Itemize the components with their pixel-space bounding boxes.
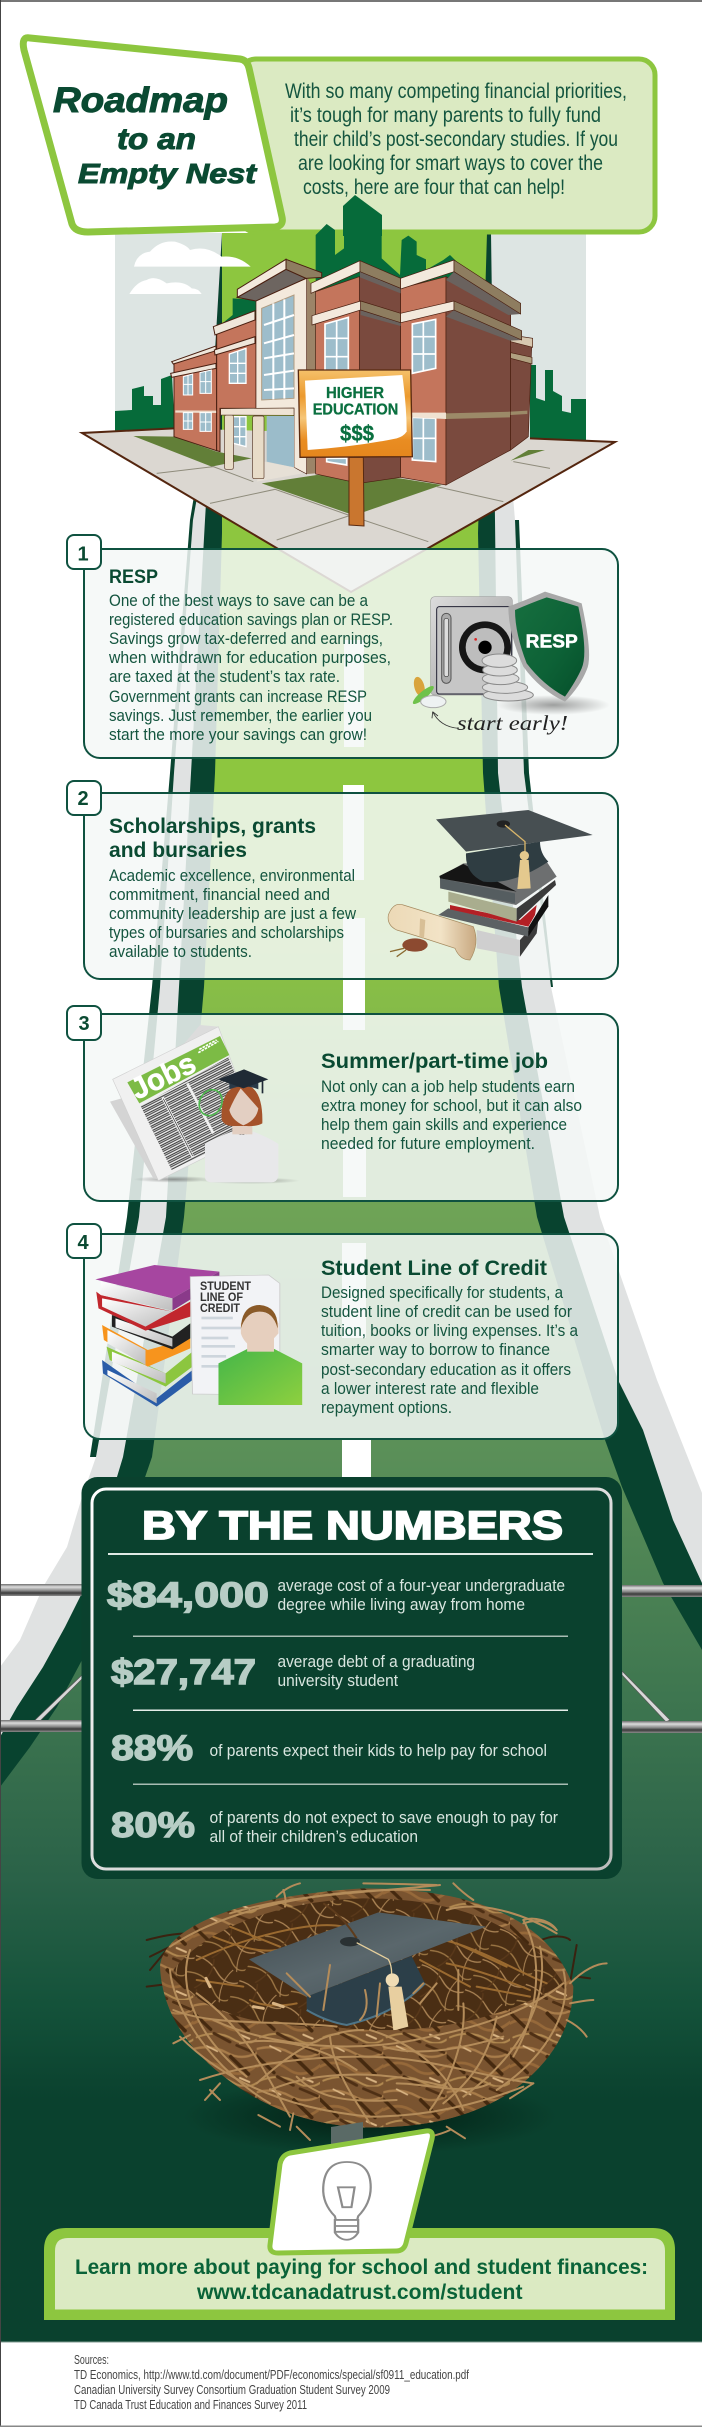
body text [321, 1078, 582, 1153]
newspaper headline: Jobs [126, 1047, 201, 1106]
stat: 88% [111, 1729, 547, 1768]
body text: are taxed at the student’s tax rate. [109, 668, 340, 686]
far left wing [171, 346, 217, 451]
body text: types of bursaries and scholarships [109, 924, 344, 942]
entrance [221, 408, 303, 482]
stat: $84,000 [107, 1576, 565, 1615]
call to action text: Learn more about paying for school and student finances: [75, 2255, 648, 2279]
nest bowl [160, 1888, 573, 2127]
interior twigs [173, 1898, 563, 2035]
body text: a lower interest rate and flexible [321, 1380, 539, 1398]
mid-left wing [213, 311, 256, 452]
guard rails [1, 1584, 702, 1733]
body text: Not only can a job help students earn [321, 1078, 575, 1096]
skyline: tower over intro panel [343, 195, 382, 236]
body text: available to students. [109, 943, 252, 961]
body text [321, 1284, 579, 1417]
call to action text [75, 2255, 648, 2304]
footer: sources: TD Economics, http://www.td.com/document/PDF/economics/special/sf0911_education.pdf [74, 2368, 469, 2382]
loose back twigs [147, 1933, 590, 1987]
illustration: school building [82, 224, 615, 592]
icon: cap, books and scroll [388, 810, 593, 960]
road: left outer edge [90, 430, 209, 1457]
light bulb [323, 2162, 371, 2240]
nest strands [170, 1883, 607, 2140]
clouds [129, 241, 251, 294]
road: right outer edge [515, 520, 553, 987]
number badge 1: 1 [77, 544, 89, 566]
sign post [349, 457, 364, 526]
main windows [325, 317, 436, 465]
body text: Academic excellence, environmental [109, 867, 355, 885]
body text: savings. Just remember, the earlier you [109, 707, 372, 725]
icon: safe, coins, shield and pacifier [411, 592, 610, 735]
footer: sources: Canadian University Survey Consortium Graduation Student Survey 2009 [74, 2383, 390, 2397]
heading: and bursaries [109, 839, 247, 862]
application title: LINE OF [200, 1290, 243, 1304]
heading: BY THE NUMBERS [142, 1504, 563, 1548]
sidewalk base [82, 428, 615, 592]
sign stem under nest [331, 2122, 363, 2150]
body text: tuition, books or living expenses. It’s a [321, 1322, 579, 1340]
body text: extra money for school, but it can also [321, 1097, 582, 1115]
trim band [412, 411, 527, 419]
heading: Summer/part-time job [321, 1050, 548, 1073]
panel: learn more [44, 2228, 675, 2320]
tower roof [237, 259, 322, 301]
sidewalk joints [157, 462, 550, 542]
application title: CREDIT [200, 1301, 241, 1315]
stat: 88%: of parents expect their kids to help pay for school [210, 1742, 547, 1760]
title text: to an [117, 123, 196, 156]
number badge 3: 3 [78, 1013, 90, 1035]
body text: needed for future employment. [321, 1135, 535, 1153]
intro text: With so many competing financial priorities, [285, 80, 627, 103]
panel: step 3 summer job [67, 1006, 618, 1201]
body text: repayment options. [321, 1399, 452, 1417]
main cornices [311, 260, 522, 340]
stat: 88%: 88% [111, 1729, 193, 1768]
stat: $84,000: $84,000 [107, 1576, 269, 1615]
body text [109, 867, 356, 961]
sign board [298, 370, 412, 457]
footer: sources: TD Canada Trust Education and Finances Survey 2011 [74, 2398, 307, 2412]
body text: Designed specifically for students, a [321, 1284, 564, 1302]
footer: sources: Sources: [74, 2353, 109, 2367]
stat: $27,747: university student [278, 1672, 398, 1690]
stat: $84,000: average cost of a four-year undergraduate [278, 1577, 565, 1595]
number badge 4: 4 [77, 1232, 89, 1254]
tower window wall [262, 295, 294, 400]
title text: Empty Nest [78, 158, 258, 189]
heading: Scholarships, grants [109, 815, 316, 838]
nest front wall [163, 1980, 570, 2127]
panel: step 1 RESP [67, 535, 618, 758]
stat: 80%: 80% [111, 1806, 195, 1845]
panel: step 2 scholarships [67, 781, 618, 979]
skyline [115, 224, 586, 442]
body text: Government grants can increase RESP [109, 688, 367, 706]
footer: sources [0, 2342, 702, 2427]
icon: newspaper and student [110, 1025, 300, 1184]
stat: 80%: all of their children’s education [210, 1828, 418, 1846]
body text [108, 592, 393, 744]
body text: smarter way to borrow to finance [321, 1341, 550, 1359]
application title: STUDENT [200, 1279, 252, 1293]
heading: Student Line of Credit [321, 1257, 547, 1280]
number badge 2: 2 [77, 788, 89, 810]
body text: student line of credit can be used for [321, 1303, 572, 1321]
application title [200, 1279, 252, 1315]
intro text: their child’s post-secondary studies. If you [294, 128, 618, 151]
title text: Roadmap [53, 81, 228, 120]
body text: help them gain skills and experience [321, 1116, 567, 1134]
shield label: RESP [526, 632, 578, 652]
nest interior [173, 1898, 563, 2030]
body text: post-secondary education as it offers [321, 1361, 571, 1379]
icon: books, application and student [95, 1265, 302, 1407]
grass [133, 436, 545, 513]
illustration: nest with graduation cap [147, 1883, 607, 2155]
heading: RESP [109, 567, 158, 588]
call to action text: www.tdcanadatrust.com/student [196, 2280, 522, 2304]
number badge 2 [67, 781, 101, 815]
graduation cap [249, 1903, 486, 2031]
body text: commitment, financial need and [109, 886, 330, 904]
heading rule [108, 1553, 593, 1555]
body text: registered education savings plan or RESP. [109, 611, 393, 629]
main block [316, 277, 532, 485]
stat: 80%: of parents do not expect to save enough to pay for [210, 1809, 558, 1827]
illustration: school building: $$$ [340, 421, 374, 446]
sign text: HIGHER [326, 385, 384, 402]
body text: when withdrawn for education purposes, [108, 649, 391, 667]
stat: $27,747: average debt of a graduating [278, 1653, 475, 1671]
far left windows [183, 370, 211, 431]
stat: $27,747 [111, 1653, 475, 1692]
panel: intro [240, 59, 655, 232]
main cornice shadow [360, 272, 522, 341]
number badge 1 [67, 535, 101, 569]
stat: $27,747: $27,747 [111, 1653, 256, 1692]
intro text: it’s tough for many parents to fully fund [290, 104, 601, 127]
panel: title [23, 38, 282, 232]
intro text: costs, here are four that can help! [303, 176, 565, 199]
wing cornices [511, 335, 533, 364]
number badge 3 [67, 1006, 101, 1040]
nest shadow [183, 2078, 557, 2155]
stat: $84,000: degree while living away from home [278, 1596, 525, 1614]
stat: 80% [111, 1806, 558, 1846]
body text: One of the best ways to save can be a [109, 592, 369, 610]
body text: start the more your savings can grow! [109, 726, 367, 744]
handwritten note: start early! [457, 711, 568, 735]
sky panel [115, 233, 586, 443]
title text [53, 81, 258, 189]
sign paper [305, 375, 407, 450]
number badge 4 [67, 1224, 101, 1258]
icon card: light bulb [270, 2131, 432, 2253]
intro text [285, 80, 627, 199]
panel: by the numbers [82, 1477, 622, 1879]
body text: community leadership are just a few [109, 905, 356, 923]
panel: step 4 line of credit [67, 1224, 618, 1439]
intro text: are looking for smart ways to cover the [298, 152, 603, 175]
body text: Savings grow tax-deferred and earnings, [109, 630, 383, 648]
heading [109, 815, 316, 862]
road: centre dashes [342, 640, 371, 1478]
mid-left windows [229, 348, 246, 447]
central tower [307, 277, 316, 474]
illustration: school building: EDUCATION [313, 402, 398, 418]
